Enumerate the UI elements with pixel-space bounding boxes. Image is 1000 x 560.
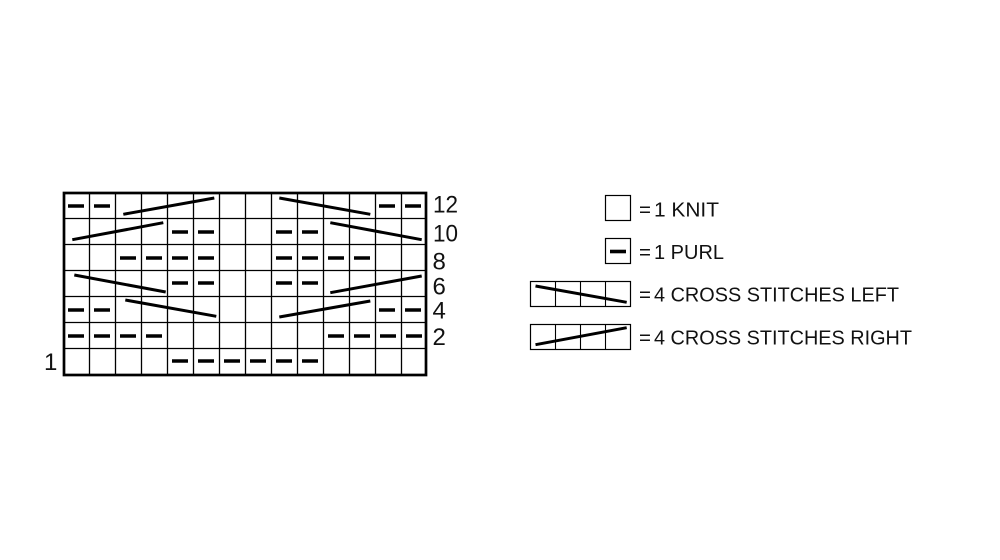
legend: purl: 1 PURL xyxy=(654,241,724,264)
row numbers: 6 xyxy=(432,273,446,300)
cross stitches xyxy=(72,198,422,317)
legend: knit xyxy=(606,196,719,222)
legend: purl xyxy=(606,238,724,264)
row numbers: 1 xyxy=(44,349,57,376)
legend: cross stitches right: 4 CROSS STITCHES RIGHT xyxy=(654,326,912,350)
purl stitches xyxy=(68,206,422,361)
legend: purl: = xyxy=(639,241,651,264)
row numbers xyxy=(44,191,458,376)
row numbers: 12 xyxy=(433,191,458,218)
legend: knit: 1 KNIT xyxy=(654,198,719,222)
row numbers: 4 xyxy=(432,298,446,324)
legend: cross stitches right xyxy=(530,324,912,350)
row numbers: 2 xyxy=(432,324,446,351)
row numbers: 10 xyxy=(433,220,458,248)
legend: cross stitches right: = xyxy=(639,326,651,350)
knitting chart xyxy=(63,193,427,375)
legend: knit: = xyxy=(639,198,651,222)
legend: cross stitches left: 4 CROSS STITCHES LEFT xyxy=(654,284,899,306)
row numbers: 8 xyxy=(432,248,446,275)
legend: cross stitches left xyxy=(530,282,899,306)
legend: cross stitches left: = xyxy=(639,284,651,306)
